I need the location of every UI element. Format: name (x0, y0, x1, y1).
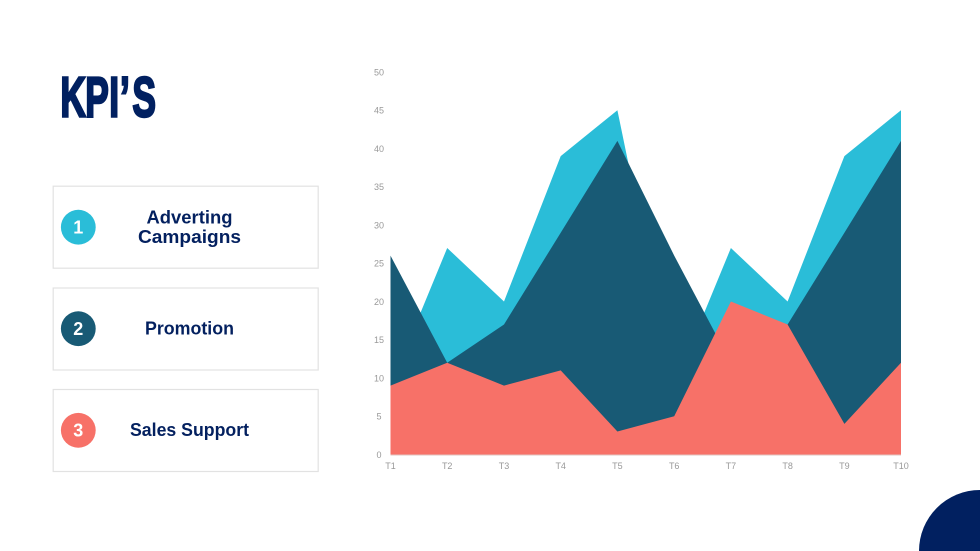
x axis labels: T10 (893, 461, 909, 471)
y axis labels: 15 (374, 335, 384, 345)
x axis labels: T4 (555, 461, 566, 471)
icon: number 3 badge (61, 413, 96, 448)
x axis labels: T2 (442, 461, 452, 471)
y axis labels: 10 (374, 374, 384, 384)
x axis labels: T5 (612, 461, 623, 471)
panel: item 2 Promotion (53, 288, 318, 370)
y axis labels: 0 (376, 450, 382, 460)
icon: number 3 badge: 3 (73, 421, 83, 441)
text: Adverting Campaigns (138, 206, 241, 247)
text: Adverting Campaigns: Adverting (146, 206, 232, 228)
y axis labels: 25 (374, 259, 384, 269)
y axis labels: 35 (374, 182, 384, 192)
y axis labels: 5 (376, 412, 382, 422)
y axis labels: 30 (374, 220, 384, 230)
panel: item 3 Sales Support (53, 390, 318, 472)
icon: number 2 badge (61, 311, 96, 346)
x axis labels: T3 (499, 461, 509, 471)
text: Promotion: Promotion (145, 318, 234, 338)
panel: item 1 Adverting Campaigns (53, 186, 318, 268)
x axis labels: T7 (726, 461, 736, 471)
x axis labels: T1 (385, 461, 396, 471)
series: dark teal area (390, 141, 901, 454)
icon: number 1 badge: 1 (73, 218, 83, 238)
x axis labels: T6 (669, 461, 679, 471)
x axis labels: T9 (839, 461, 850, 471)
x axis line (390, 454, 901, 456)
y axis labels: 50 (374, 68, 384, 78)
corner quarter circle (919, 490, 980, 551)
text: Sales Support: Sales Support (130, 419, 249, 440)
icon: number 1 badge (61, 210, 96, 245)
y axis labels: 45 (374, 106, 384, 116)
y axis labels: 40 (374, 144, 384, 154)
y axis labels (374, 68, 384, 460)
x axis labels: T8 (782, 461, 793, 471)
area chart (374, 68, 909, 471)
title: KPI’S (60, 66, 156, 130)
text: Adverting Campaigns: Campaigns (138, 226, 241, 247)
series: cyan area (390, 110, 901, 454)
icon: number 2 badge: 2 (73, 319, 83, 339)
series: coral area (390, 302, 901, 454)
x axis labels (385, 461, 909, 471)
y axis labels: 20 (374, 297, 384, 307)
